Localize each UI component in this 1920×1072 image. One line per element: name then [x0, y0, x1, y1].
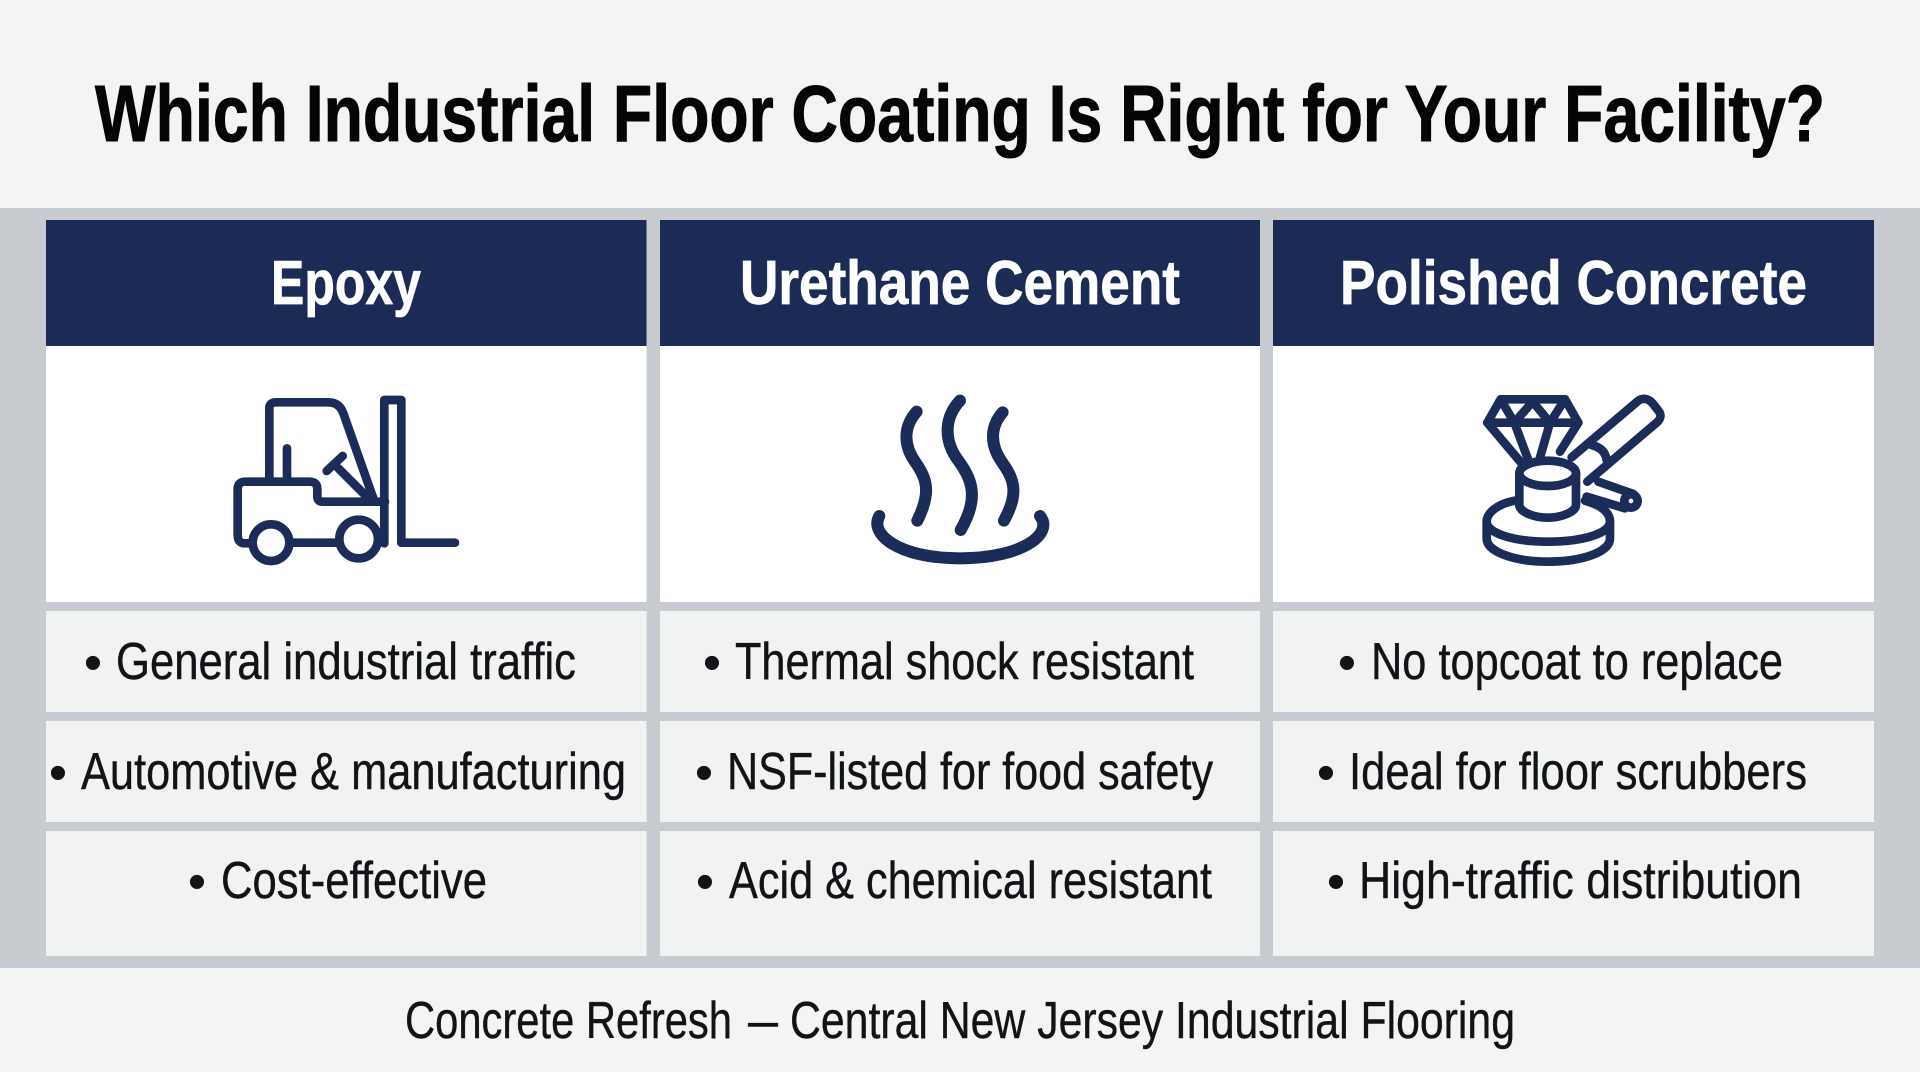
Urethane Cement icon cell [660, 346, 1260, 602]
Polished Concrete row 1: No topcoat to replace [1371, 633, 1783, 691]
Urethane Cement row 1: Thermal shock resistant [735, 633, 1194, 691]
Urethane Cement row 3: Acid & chemical resistant [729, 852, 1212, 910]
Urethane Cement row 1 [660, 611, 1260, 712]
panel: Polished Concrete column [1273, 220, 1874, 956]
icon: heat waves [877, 401, 1043, 558]
Polished Concrete icon cell [1273, 346, 1874, 602]
Polished Concrete row 2 [1273, 721, 1874, 822]
Polished Concrete row 2: Ideal for floor scrubbers [1349, 743, 1807, 801]
Polished Concrete header bar: Polished Concrete [1340, 249, 1807, 318]
Urethane Cement row 3 [660, 831, 1260, 956]
Urethane Cement row 2: NSF-listed for food safety [727, 743, 1213, 801]
Epoxy row 2: • [49, 744, 67, 802]
Epoxy row 2 [46, 721, 646, 822]
Polished Concrete row 3: High-traffic distribution [1359, 852, 1802, 910]
Epoxy row 1: • [84, 634, 102, 692]
Epoxy row 2: Automotive & manufacturing [81, 743, 626, 801]
Epoxy icon cell [46, 346, 646, 602]
Epoxy row 1 [46, 611, 646, 712]
footer text [405, 992, 1515, 1050]
table backdrop [0, 208, 1920, 968]
footer text: Central New Jersey Industrial Flooring [790, 992, 1515, 1050]
Urethane Cement row 1: • [703, 634, 721, 692]
footer text: Concrete Refresh [405, 992, 732, 1050]
Epoxy header bar [46, 220, 646, 346]
Polished Concrete row 3 [1273, 831, 1874, 956]
Epoxy header bar: Epoxy [271, 249, 421, 318]
Epoxy row 3 [46, 831, 646, 956]
Polished Concrete row 1: • [1338, 634, 1356, 692]
panel: Urethane Cement column [660, 220, 1260, 956]
Urethane Cement row 3: • [696, 853, 714, 911]
Urethane Cement header bar: Urethane Cement [740, 249, 1180, 318]
Epoxy row 3: Cost-effective [221, 852, 487, 910]
Urethane Cement row 2: • [695, 744, 713, 802]
panel: Epoxy column [46, 220, 646, 956]
Polished Concrete row 3: • [1327, 853, 1345, 911]
Polished Concrete row 2: • [1317, 744, 1335, 802]
icon: forklift [238, 400, 455, 561]
Epoxy row 1: General industrial traffic [116, 633, 576, 691]
Polished Concrete header bar [1273, 220, 1874, 346]
Polished Concrete row 1 [1273, 611, 1874, 712]
Urethane Cement row 2 [660, 721, 1260, 822]
icon: diamond polisher [1487, 399, 1660, 562]
footer text: — [748, 992, 778, 1050]
Urethane Cement header bar [660, 220, 1260, 346]
Epoxy row 3: • [188, 853, 206, 911]
